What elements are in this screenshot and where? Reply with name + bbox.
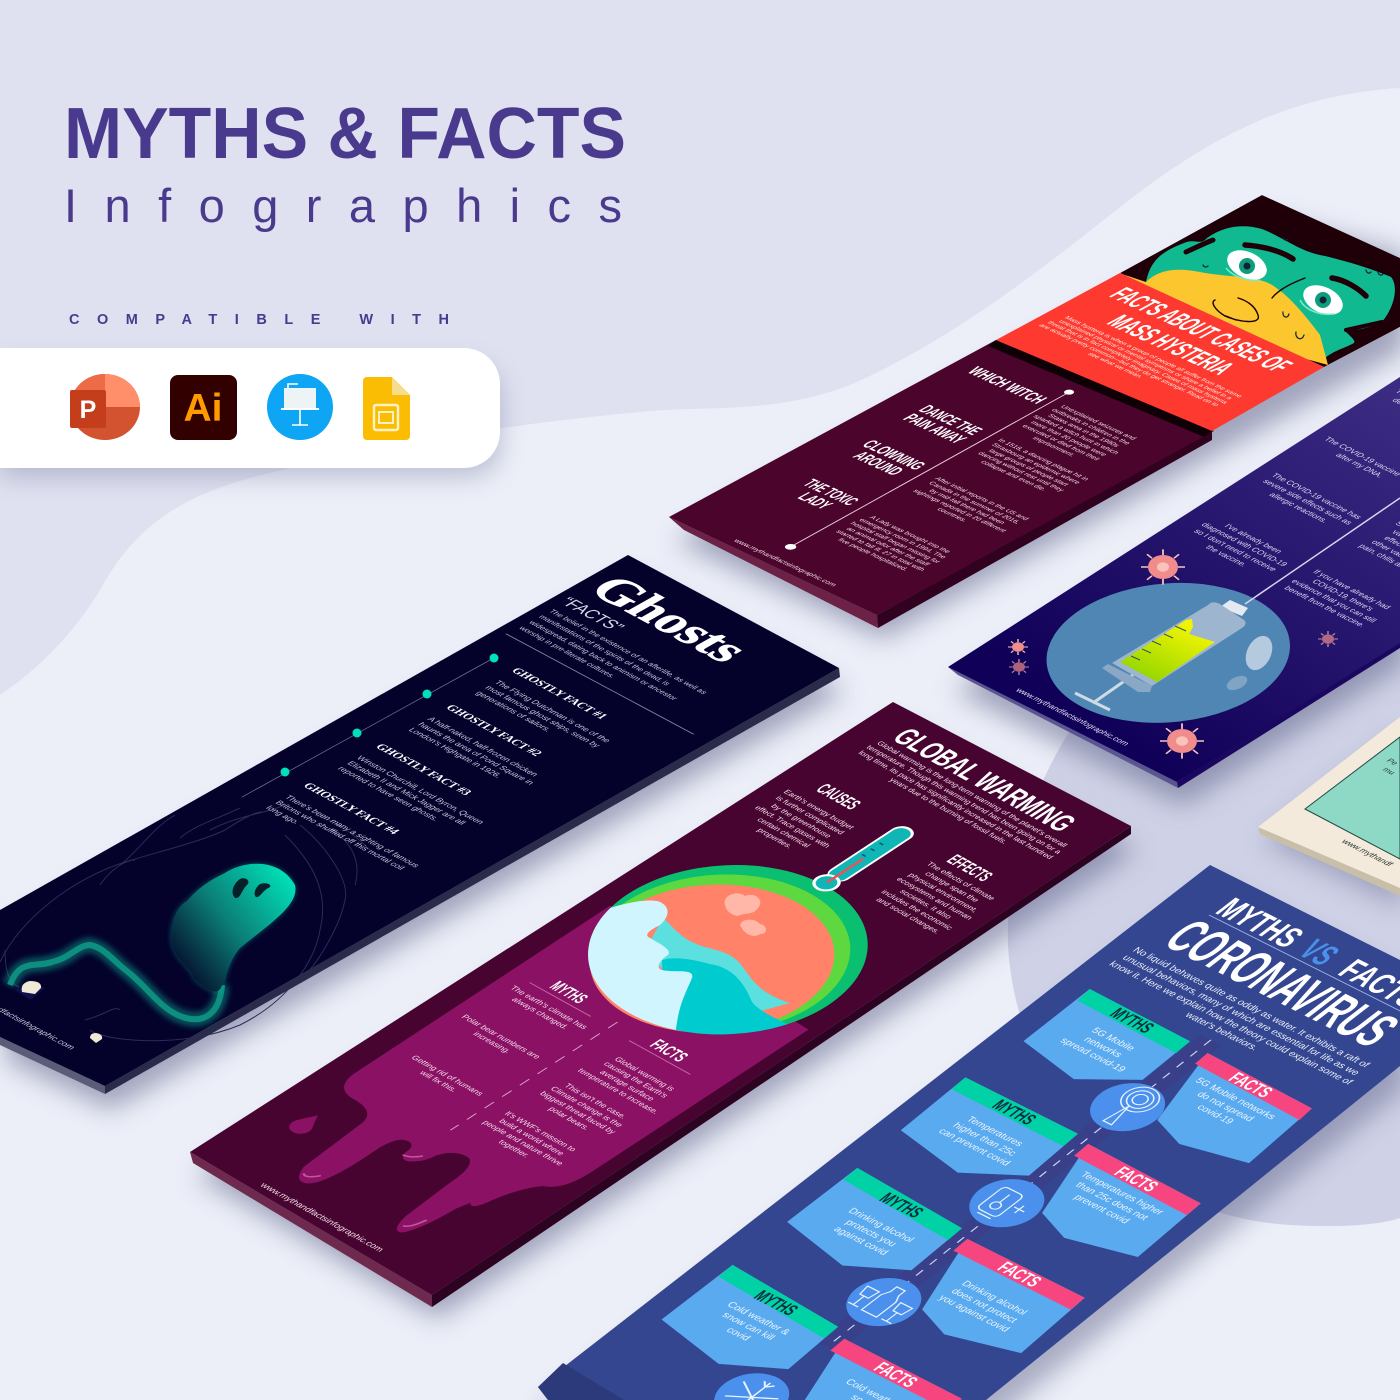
- facts column: causing the Earth's: [601, 1060, 671, 1099]
- intro text: manifestations of the spirits of the dead, is: [537, 614, 673, 687]
- myth card 3: Drinking alcohol: [845, 1207, 916, 1244]
- ghost character: [10, 864, 296, 1019]
- fact card 2: Temperatures higher: [1077, 1170, 1166, 1217]
- planet rings: [528, 830, 926, 1071]
- causes: is further complicated: [773, 795, 847, 836]
- myth card 2: Temperatures: [963, 1115, 1025, 1149]
- title: MYTHS & FACTS: [64, 94, 626, 174]
- subheading: “FACTS”: [556, 595, 629, 634]
- myth card 4: covid: [723, 1326, 753, 1343]
- facts column: together.: [496, 1138, 533, 1159]
- effects: physical environment,: [906, 872, 980, 914]
- fact card 3: does not protect: [948, 1287, 1020, 1325]
- myths column: Polar bear numbers are: [459, 1013, 544, 1060]
- fact card 2: prevent covid: [1071, 1193, 1132, 1226]
- causes: CAUSES: [811, 781, 865, 813]
- timeline labels: WHICH WITCH: [963, 364, 1052, 406]
- vaccine text: COVID-19, there's: [1310, 578, 1376, 612]
- timeline labels: CLOWNING: [858, 437, 931, 472]
- myth card 2: higher than 25c: [950, 1121, 1019, 1158]
- sphere highlights: [1224, 632, 1277, 693]
- icon: Illustrator: Ai: [184, 387, 222, 430]
- beige text: Pe: [1384, 757, 1400, 766]
- timeline text: an animal odor after the staff: [844, 527, 931, 567]
- facts: GHOSTLY FACT #4: [300, 781, 403, 836]
- icon: snowflake: [699, 1364, 805, 1400]
- myth card 2: MYTHS: [987, 1097, 1040, 1128]
- timeline text: sparked a witch hunt in which: [1031, 414, 1120, 455]
- effects: change span the: [923, 870, 982, 904]
- facts column: Global warming is: [612, 1055, 678, 1092]
- thermometer: [806, 822, 920, 895]
- effects: includes the economic: [879, 888, 955, 931]
- fact card 3: Drinking alcohol: [959, 1279, 1029, 1317]
- timeline text: executed or died from their: [1020, 424, 1102, 462]
- intro text: Global warming is the long-term warming of the planet's overall: [875, 740, 1070, 849]
- causes: Earth's energy budget: [781, 788, 857, 831]
- facts: Winston Churchill, Lord Byron, Queen: [354, 754, 487, 826]
- myth card 3: MYTHS: [874, 1190, 928, 1222]
- myth card 1: [1013, 989, 1193, 1100]
- planet surface: [588, 893, 790, 1034]
- fact card 2: FACTS: [1109, 1164, 1162, 1196]
- intro text: No liquid behaves quite as oddly as water. It exhibits a raft of: [1130, 946, 1372, 1070]
- heading: myths vs facts: [1206, 891, 1400, 1018]
- causes: effect. Trace gases with: [753, 804, 832, 849]
- facts column: build a world where: [497, 1117, 568, 1157]
- icon: 5G antenna: [1075, 1074, 1181, 1141]
- timeline text: dancing without rest until they: [976, 451, 1066, 493]
- tombstones: [15, 980, 102, 1043]
- myth card 1: MYTHS: [1105, 1005, 1158, 1037]
- beige text: mu: [1380, 766, 1398, 776]
- dashed divider: [450, 1021, 618, 1131]
- timeline labels: THE TOXIC: [799, 476, 864, 508]
- intro text: are actually pretty common—but they do get stranger. Read on to: [1037, 323, 1221, 408]
- vaccine text: alter my DNA.: [1333, 452, 1386, 479]
- teal box: [1305, 737, 1400, 859]
- facts: [242, 653, 650, 879]
- intro text: years due to the burning of fossil fuels.: [887, 776, 1010, 845]
- icon: thermometer: [954, 1170, 1060, 1237]
- timeline text: imprisonment.: [1030, 436, 1076, 458]
- icon: PowerPoint: [70, 374, 140, 440]
- timeline text: outbreaks in children in the: [1050, 408, 1131, 446]
- facts: The Flying Dutchman is one of the: [492, 679, 614, 744]
- fact card 3: [883, 1238, 1090, 1365]
- icon: PowerPoint: P: [80, 396, 96, 424]
- timeline text: hospital staff began missing for: [848, 521, 942, 565]
- intro text: unusual behaviors, many of which are essential for life as we: [1119, 954, 1362, 1078]
- fact card 4: FACTS: [868, 1360, 922, 1391]
- myth card 2: [887, 1077, 1081, 1195]
- facts column: people and nature thrive: [480, 1118, 567, 1167]
- timeline text: States area in the 1990s: [1046, 413, 1121, 448]
- timeline text: In 1518, a dancing plague hit in: [996, 438, 1090, 482]
- icon: Keynote: [267, 374, 333, 440]
- fact card 2: [1005, 1144, 1207, 1268]
- facts: long ago.: [264, 804, 303, 825]
- facts: GHOSTLY FACT #3: [372, 742, 475, 797]
- intro text: water's behaviors.: [1181, 1010, 1261, 1053]
- intro text: know it. Here we explain how the theory could explain some of: [1106, 960, 1355, 1087]
- panel: vaccine myths: [948, 377, 1400, 806]
- facts column: polar bears.: [546, 1105, 593, 1131]
- timeline text: started to fall ill. 27 in total with: [834, 529, 926, 572]
- myths column: The earth's climate has: [508, 984, 591, 1031]
- icon: wine and bottle: [831, 1269, 937, 1336]
- effects: societies. It also: [897, 888, 955, 920]
- vaccine text: diagnosed with COVID-19: [1199, 521, 1290, 568]
- intro text: long time, its pace has significantly increased in the last hundred: [856, 749, 1055, 860]
- effects: [868, 845, 1021, 938]
- sphere: [996, 555, 1340, 751]
- myth card 4: [649, 1265, 848, 1387]
- timeline text: more than 20 people were: [1028, 420, 1108, 457]
- fact card 1: FACTS: [1223, 1070, 1277, 1101]
- causes: by the greenhouse: [769, 803, 834, 840]
- timeline labels: PAIN AWAY: [899, 411, 972, 446]
- fact card 3: FACTS: [992, 1259, 1046, 1291]
- facts: reported to have seen ghosts.: [336, 765, 442, 822]
- heading: [1074, 284, 1299, 392]
- facts column: temperature to increase.: [575, 1067, 662, 1115]
- myth card 4: snow can kill: [719, 1311, 777, 1342]
- timeline labels: DANCE THE: [914, 402, 987, 437]
- facts: generations of sailors.: [473, 689, 554, 733]
- background blob: lower right: [1008, 610, 1400, 1226]
- fact card 1: 5G Mobile networks: [1192, 1076, 1278, 1122]
- vaccine text: severe side effects such as: [1261, 478, 1354, 526]
- causes: [735, 771, 883, 861]
- website: www.mythandfactsinfographic.com: [731, 538, 839, 588]
- fact card 2: than 25c does not: [1073, 1181, 1151, 1222]
- timeline text: collapse and even die.: [979, 460, 1048, 492]
- vaccine text: [965, 388, 1400, 767]
- vaccine text: evidence that you can still: [1289, 578, 1379, 624]
- fact card 1: [1125, 1053, 1319, 1173]
- myth card 1: 5G Mobile: [1089, 1026, 1137, 1053]
- timeline text: [818, 402, 1160, 579]
- drip highlights: [303, 1129, 477, 1232]
- facts: GHOSTLY FACT #2: [443, 703, 546, 758]
- vaccine text: the vaccine.: [1203, 544, 1249, 568]
- facts column: [471, 1022, 723, 1178]
- fact card 1: do not spread: [1194, 1090, 1256, 1124]
- intro text: temperature. Though this warming trend has been going on for a: [864, 744, 1064, 856]
- black band: [988, 340, 1212, 437]
- panel face: [190, 702, 1131, 1295]
- causes: properties.: [755, 827, 795, 850]
- causes: certain chemical: [755, 816, 813, 849]
- heading: MASS HYSTERIA: [1100, 311, 1242, 379]
- icon: Google Slides: [363, 377, 410, 440]
- facts column: This isn't the case.: [562, 1082, 630, 1120]
- footer strip: [538, 1363, 624, 1400]
- facts: There's been many a sighting of famous: [283, 794, 422, 869]
- timeline text: sightings reported in 20 different: [911, 489, 1008, 533]
- effects: The effects of climate: [924, 861, 998, 902]
- road: [808, 1035, 1230, 1352]
- tree line art: [0, 805, 370, 1041]
- facts: haunts the area of Pond Square in: [416, 721, 537, 786]
- myths column: always changed.: [509, 995, 571, 1031]
- panel: facts about mass hysteria: [669, 195, 1400, 639]
- red title band: [996, 273, 1324, 431]
- background blob: top left: [0, 0, 1400, 695]
- intro text: widespread, dating back to animism or ancestor: [526, 619, 680, 702]
- heading: Ghosts: [577, 569, 763, 670]
- fact card 3: you against covid: [936, 1294, 1012, 1334]
- effects: EFFECTS: [942, 852, 997, 885]
- eyes: [1226, 250, 1343, 316]
- vaccine text: If you have already had: [1311, 568, 1393, 611]
- vaccine text: allergic reactions.: [1267, 491, 1330, 524]
- compatible with label: COMPATIBLE WITH: [69, 312, 449, 328]
- myth card 4: Cold weather &: [724, 1300, 793, 1337]
- panel: beige infographic: [1258, 717, 1400, 909]
- myths column: MYTHS: [545, 978, 593, 1006]
- myths column: will fix this.: [417, 1068, 460, 1093]
- timeline labels: [760, 364, 1052, 517]
- myth card 3: protects you: [842, 1218, 899, 1249]
- website: www.mythandfactsinfographic.com: [257, 1181, 386, 1253]
- timeline text: large groups of people start: [986, 449, 1070, 487]
- myth card 2: can prevent covid: [936, 1127, 1013, 1168]
- virus icons: [1008, 549, 1338, 759]
- panel face: [948, 377, 1400, 782]
- syringe: [1075, 498, 1400, 710]
- beige text: [1342, 758, 1397, 866]
- timeline: [779, 389, 1080, 551]
- panel: coronavirus myths vs facts: [538, 865, 1400, 1400]
- myths column: [394, 965, 617, 1104]
- subtitle: Infographics: [64, 179, 622, 232]
- facts: Elizabeth II and Mick Jagger are all: [345, 760, 469, 826]
- intro text: Mass hysteria is when a group of people all suffer from the same: [1062, 316, 1244, 399]
- timeline labels: AROUND: [848, 449, 908, 478]
- facts column: Climate change is the: [548, 1085, 626, 1129]
- timeline text: countries.: [935, 507, 969, 523]
- timeline text: Strasbourg an epidemic where: [989, 443, 1082, 485]
- panel: global warming: [190, 702, 1137, 1319]
- maroon body: [669, 340, 1214, 615]
- facts column: biggest threat faced by: [538, 1089, 620, 1136]
- myth card 3: [775, 1168, 971, 1288]
- intro text: The belief in the existence of an afterlife, as well as: [547, 608, 710, 696]
- heading: myths vs facts: VS: [1290, 933, 1348, 971]
- vaccine text: so I don't need to receive: [1192, 528, 1279, 573]
- timeline text: by mid-fall there had been: [927, 489, 1006, 525]
- facts column: It's WWF's mission to: [502, 1110, 579, 1153]
- facts: London's Highgate in 1926.: [406, 726, 505, 779]
- facts column: FACTS: [645, 1036, 693, 1065]
- myths column: Getting rid of humans: [409, 1054, 486, 1097]
- panel: ghosts: [0, 555, 845, 1110]
- timeline labels: LADY: [793, 490, 838, 512]
- fact card 4: [761, 1339, 968, 1400]
- vaccine text: The COVID-19 vaccine has: [1269, 472, 1364, 521]
- icon: Illustrator: [170, 375, 237, 440]
- fact card 1: covid-19: [1194, 1103, 1236, 1127]
- timeline text: emergency room in 1994. The: [857, 518, 948, 560]
- intro text: worship in pre-literate cultures.: [516, 624, 618, 679]
- intro text: threat that is in fact completely imaginary. Cases of mass hysteria: [1045, 321, 1229, 405]
- panel face: [538, 865, 1400, 1400]
- ghost text: [0, 567, 812, 1068]
- panel face: [0, 555, 839, 1086]
- heading: myths vs facts: MYTHS: [1207, 892, 1313, 954]
- effects: and social changes.: [874, 896, 942, 935]
- timeline text: five people hospitalized.: [836, 538, 910, 572]
- facts: A half-naked, half-frozen chicken: [425, 715, 541, 778]
- myths column: increasing.: [471, 1030, 514, 1055]
- myth card 1: spread covid-19: [1057, 1036, 1128, 1074]
- magenta drip area: [241, 906, 820, 1264]
- face illustration: [1120, 195, 1400, 367]
- timeline text: Unexplained seizures and: [1058, 404, 1137, 441]
- myth card 3: against covid: [831, 1225, 890, 1257]
- beige text: www.mythandf: [1338, 837, 1397, 868]
- facts: GHOSTLY FACT #1: [508, 666, 611, 721]
- timeline dots: [280, 654, 498, 776]
- intro text: see what we mean.: [1086, 352, 1145, 379]
- effects: ecosystems and human: [894, 876, 975, 921]
- facts column: average surface: [597, 1068, 658, 1103]
- intro text: unexplained physical or mental symptoms or share a belief in a: [1057, 319, 1234, 401]
- timeline text: After initial reports in the US and: [933, 476, 1030, 521]
- timeline text: Canada in the summer of 2016,: [927, 481, 1022, 525]
- local content: [682, 280, 1311, 605]
- heading: GLOBAL WARMING: [885, 723, 1085, 837]
- facts: most famous ghost ships, seen by: [483, 684, 604, 749]
- facts: Britons who shuffled off this mortal coil: [273, 799, 408, 871]
- myth card 1: networks: [1081, 1035, 1125, 1060]
- myth card 4: MYTHS: [749, 1288, 802, 1319]
- brows and details: [1186, 238, 1383, 339]
- timeline text: A Lady was brought into the: [867, 515, 952, 554]
- vaccine text: benefit from the vaccine.: [1282, 585, 1368, 629]
- vaccine text: www.mythandfactsinfographic.com: [1013, 686, 1132, 747]
- vaccine text: I've already been: [1222, 523, 1284, 555]
- panel: compatible software card: [0, 348, 500, 476]
